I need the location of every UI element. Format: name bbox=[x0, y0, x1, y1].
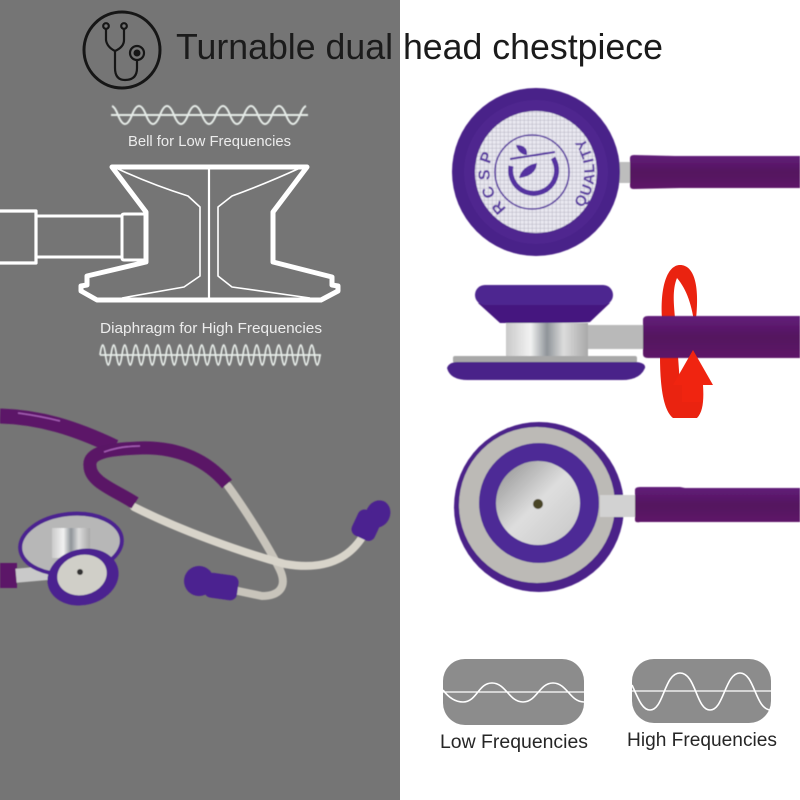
arch highlight bbox=[18, 413, 140, 452]
ear tip right bbox=[349, 496, 395, 543]
chestpiece: bell view bbox=[454, 422, 800, 592]
purple ring bbox=[479, 443, 599, 563]
tube bbox=[635, 487, 800, 522]
hole bbox=[533, 499, 543, 509]
logo u shape bbox=[511, 158, 557, 193]
box bbox=[632, 659, 771, 723]
chestpiece front metal bbox=[53, 550, 111, 600]
chestpiece hole bbox=[77, 569, 83, 575]
plate bbox=[453, 356, 637, 363]
outer rim bbox=[454, 422, 624, 592]
stem bbox=[600, 495, 636, 517]
tube bbox=[643, 316, 800, 358]
stem bbox=[585, 325, 645, 349]
icon: stethoscope in circle bbox=[84, 12, 160, 88]
purple binaural arch bbox=[90, 448, 227, 503]
label: low frequencies: Low Frequencies bbox=[440, 731, 588, 753]
chestpiece stem bbox=[15, 565, 57, 583]
panel: low frequencies chart bbox=[443, 659, 584, 725]
panel: right white background bbox=[400, 0, 800, 800]
mesh face bbox=[475, 111, 597, 233]
arrow: red rotation ring back bbox=[660, 265, 703, 418]
arc path for QUALITY bbox=[536, 114, 595, 208]
baseline bbox=[443, 691, 584, 693]
cap bbox=[475, 285, 613, 305]
box bbox=[443, 659, 584, 725]
baseline bbox=[632, 690, 771, 692]
label: RCSP: RCSP bbox=[478, 152, 506, 216]
title: Turnable dual head chestpiece bbox=[176, 26, 663, 67]
wave bbox=[632, 673, 771, 710]
wave bbox=[443, 683, 584, 702]
icon: high frequency wave bbox=[100, 345, 321, 365]
ear tip left bbox=[184, 566, 240, 601]
label: bell for low frequencies: Bell for Low Frequencies bbox=[128, 134, 291, 150]
stem bbox=[616, 162, 632, 183]
label: high frequencies: High Frequencies bbox=[627, 729, 777, 751]
chestpiece back disc bbox=[17, 509, 125, 579]
icon: low frequency wave bbox=[111, 106, 308, 124]
logo bar bbox=[510, 152, 555, 159]
chestpiece: diaphragm view bbox=[451, 87, 800, 257]
chestpiece tube bbox=[0, 563, 17, 588]
diagram: chestpiece cross-section bbox=[0, 167, 338, 300]
tube bbox=[630, 155, 800, 189]
arrow: red rotation arrowhead bbox=[673, 350, 713, 402]
logo ring bbox=[495, 135, 569, 209]
rim inner shade bbox=[464, 100, 608, 244]
label: QUALITY: QUALITY bbox=[574, 140, 596, 206]
silver plate bbox=[459, 427, 615, 583]
cone bbox=[478, 303, 610, 323]
chestpiece neck bbox=[52, 528, 90, 558]
silver binaural tube left bbox=[134, 507, 361, 566]
logo leaf top bbox=[516, 145, 527, 155]
silver binaural tube right bbox=[228, 486, 283, 596]
panel: left grey background bbox=[0, 0, 400, 800]
chestpiece front ring bbox=[41, 541, 125, 613]
panel: high frequencies chart bbox=[632, 659, 771, 723]
metal cone bbox=[496, 461, 580, 545]
base rim bbox=[447, 362, 645, 380]
logo leaf bottom bbox=[519, 163, 537, 178]
illustration: full stethoscope bbox=[0, 413, 395, 613]
chestpiece: side view bbox=[447, 285, 800, 380]
rim bbox=[452, 88, 620, 256]
purple main tube bbox=[0, 416, 115, 447]
label: diaphragm for high frequencies: Diaphragm for High Frequencies bbox=[100, 321, 322, 337]
bell neck bbox=[506, 323, 588, 359]
arc path for RCSP bbox=[490, 126, 536, 208]
